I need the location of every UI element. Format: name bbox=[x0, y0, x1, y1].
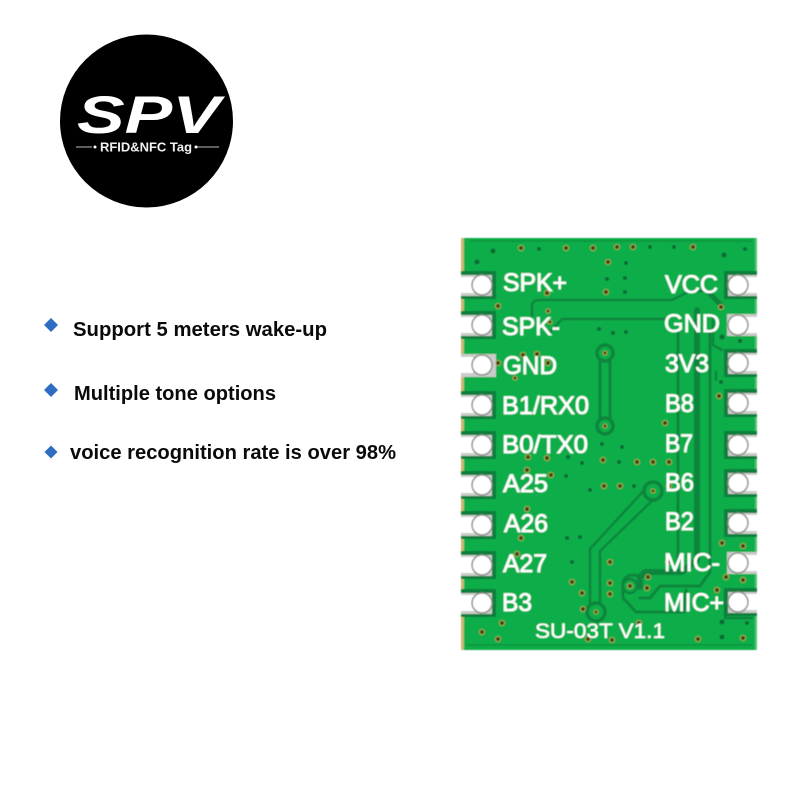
silkscreen pin labels: left column: B0/TX0 bbox=[502, 431, 588, 459]
circuit board SU-03T bbox=[461, 238, 757, 650]
bullet: wake-up distance: Support 5 meters wake-up bbox=[73, 319, 327, 341]
silkscreen pin labels: left column: SPK+ bbox=[503, 269, 567, 297]
silkscreen pin labels: right column: B6 bbox=[665, 469, 694, 497]
logo: SPV RFID&NFC Tag bbox=[60, 34, 233, 208]
silkscreen pin labels: right column: GND bbox=[664, 310, 720, 338]
right pin pads bbox=[724, 271, 757, 616]
vias bbox=[480, 244, 746, 642]
copper traces bbox=[532, 291, 752, 621]
logo tagline: RFID&NFC Tag bbox=[100, 140, 192, 154]
board model label: SU-03T V1.1 bbox=[535, 620, 665, 643]
silkscreen pin labels: right column: B7 bbox=[665, 430, 693, 458]
silkscreen pin labels: right column: 3V3 bbox=[665, 350, 709, 378]
silkscreen pin labels: right column: MIC- bbox=[664, 549, 720, 577]
silkscreen pin labels: left column: SPK- bbox=[502, 313, 560, 341]
silkscreen pin labels: right column bbox=[664, 271, 724, 617]
silkscreen pin labels: left column: A26 bbox=[504, 510, 548, 538]
silkscreen pin labels: left column: A25 bbox=[503, 470, 548, 498]
silkscreen pin labels: right column: B2 bbox=[665, 508, 694, 536]
silkscreen pin labels: left column: GND bbox=[503, 352, 557, 380]
silkscreen pin labels: left column: B3 bbox=[502, 589, 532, 617]
silkscreen pin labels: left column: B1/RX0 bbox=[502, 392, 589, 420]
bullet: tone options: Multiple tone options bbox=[74, 383, 276, 405]
logo wordmark: SPV bbox=[77, 86, 226, 145]
feature list bbox=[44, 318, 396, 464]
silkscreen pin labels: left column: A27 bbox=[503, 550, 547, 578]
silkscreen pin labels: right column: VCC bbox=[665, 271, 718, 299]
left pin pads bbox=[461, 271, 496, 617]
silkscreen pin labels: right column: MIC+ bbox=[664, 589, 724, 617]
bullet: recognition rate: voice recognition rate is over 98% bbox=[70, 442, 396, 464]
silkscreen pin labels: left column bbox=[502, 269, 589, 617]
silkscreen pin labels: right column: B8 bbox=[665, 390, 694, 418]
